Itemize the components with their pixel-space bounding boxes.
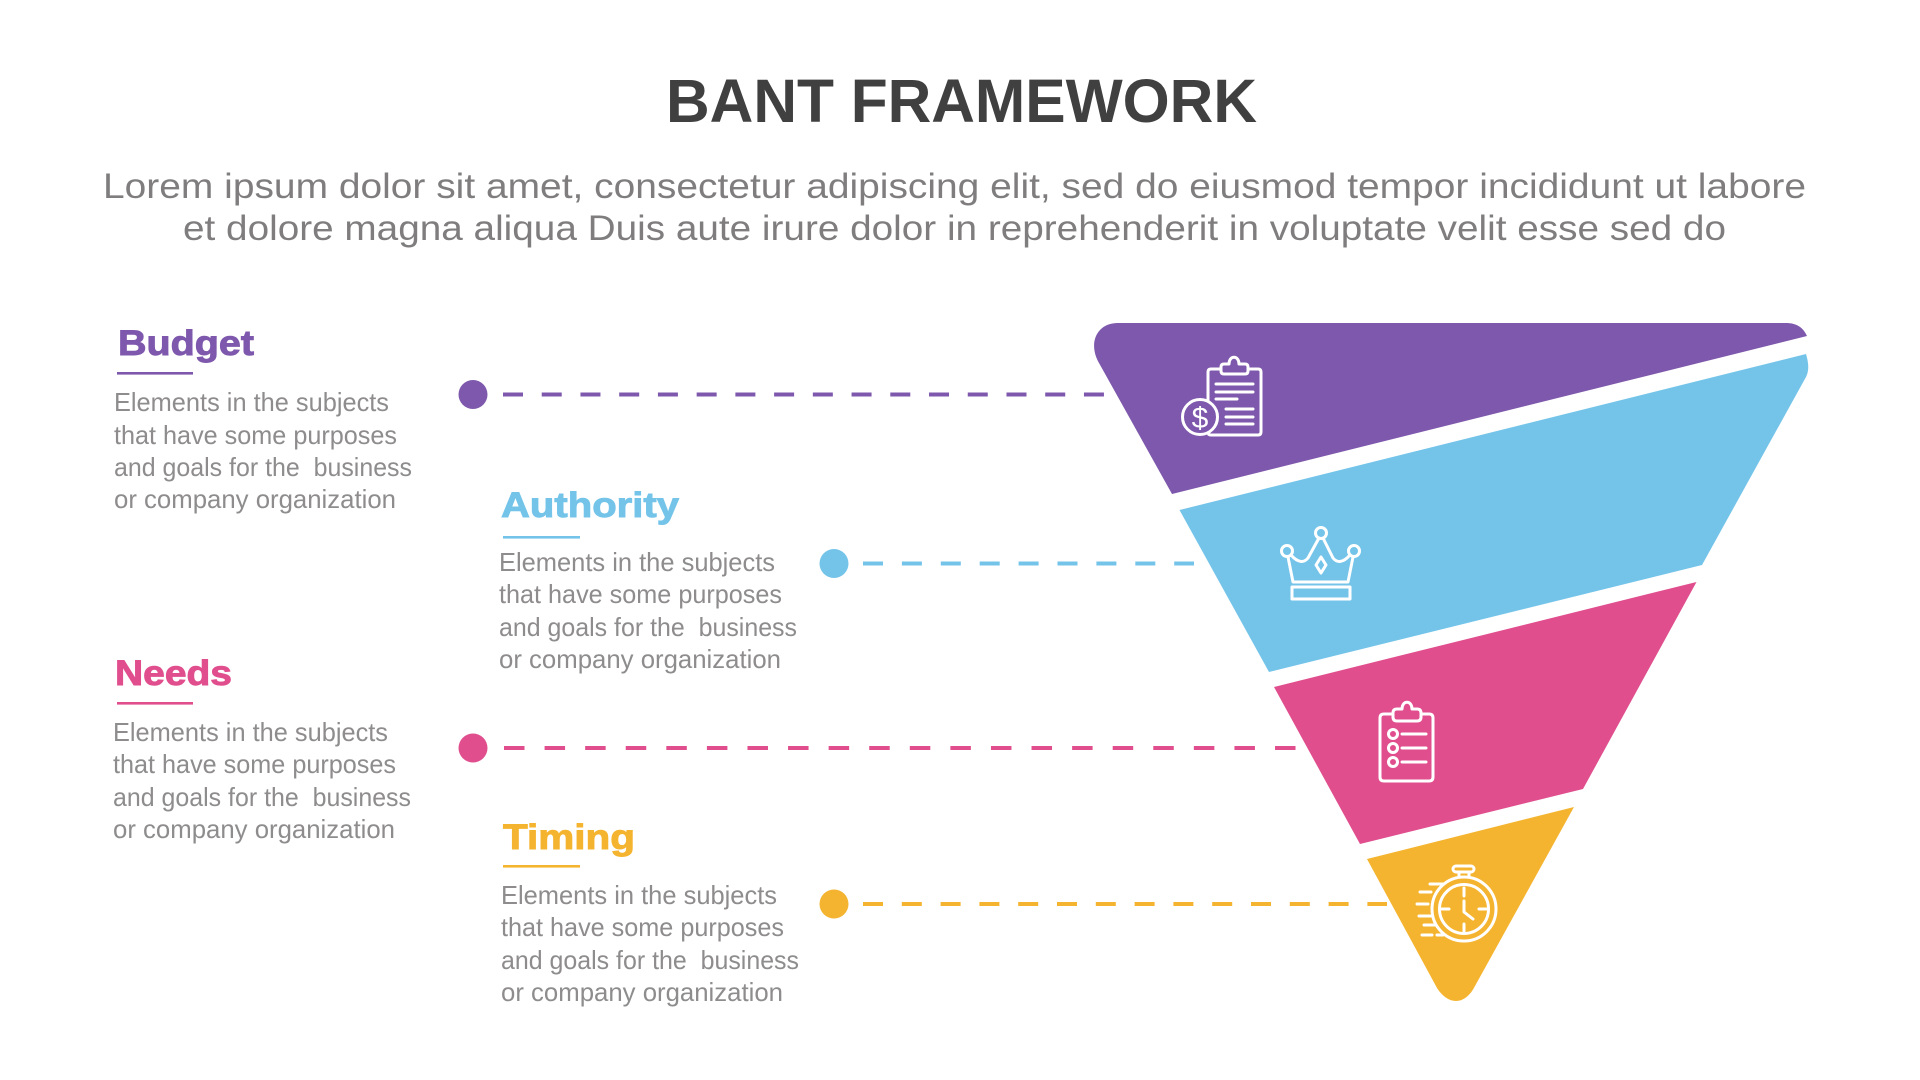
icon: authority crown [1282, 528, 1360, 599]
subtitle text block [103, 167, 1806, 248]
title: BANT FRAMEWORK [666, 67, 1257, 135]
icon: timing stopwatch [1417, 866, 1496, 941]
text block: budget description: and goals for the business [114, 452, 412, 482]
connector: authority [820, 549, 1194, 578]
text block: needs description: that have some purposes [113, 749, 396, 779]
funnel segment: authority [1180, 354, 1808, 672]
connector: budget [458, 380, 1104, 409]
panel: needs text [113, 654, 411, 844]
text block: timing description: or company organization [501, 977, 783, 1007]
heading: authority: Authority [501, 486, 680, 525]
funnel segment: budget [1094, 323, 1807, 494]
text block: needs description [113, 717, 411, 844]
text block: needs description: and goals for the business [113, 782, 411, 812]
text block: timing description [501, 880, 799, 1007]
text block: timing description: and goals for the business [501, 945, 799, 975]
text block: budget description: that have some purposes [114, 420, 397, 450]
funnel segment: needs [1274, 582, 1696, 844]
text block: authority description: Elements in the subjects [499, 547, 775, 577]
panel: timing text [501, 818, 799, 1007]
panel: authority text [499, 486, 797, 674]
text block: authority description [499, 547, 797, 674]
text block: needs description: Elements in the subjects [113, 717, 388, 747]
underline: timing [503, 865, 580, 868]
funnel chart [1094, 323, 1808, 1001]
underline: needs [117, 702, 193, 705]
connector: needs [458, 734, 1296, 762]
text block: budget description [114, 387, 412, 514]
panel: budget text [114, 324, 412, 514]
text block: timing description: Elements in the subjects [501, 880, 777, 910]
icon: budget clipboard with dollar coin: $ [1192, 402, 1209, 435]
subtitle text block: et dolore magna aliqua Duis aute irure dolor in reprehenderit in voluptate velit esse sed do [183, 209, 1726, 248]
icon: budget clipboard with dollar coin [1182, 357, 1261, 435]
subtitle text block: Lorem ipsum dolor sit amet, consectetur adipiscing elit, sed do eiusmod tempor incididunt ut labore [103, 167, 1806, 206]
text block: authority description: and goals for the business [499, 612, 797, 642]
text block: needs description: or company organization [113, 814, 395, 844]
heading: timing: Timing [503, 818, 635, 857]
icon: needs checklist clipboard [1380, 702, 1433, 781]
text block: authority description: or company organization [499, 644, 781, 674]
text block: budget description: or company organization [114, 484, 396, 514]
funnel segment: timing [1367, 807, 1574, 1001]
connector: timing [820, 890, 1387, 918]
underline: budget [117, 372, 193, 375]
underline: authority [503, 536, 580, 539]
heading: needs: Needs [115, 654, 232, 693]
text block: timing description: that have some purposes [501, 912, 784, 942]
text block: budget description: Elements in the subjects [114, 387, 389, 417]
heading: budget: Budget [118, 324, 254, 363]
text block: authority description: that have some purposes [499, 579, 782, 609]
